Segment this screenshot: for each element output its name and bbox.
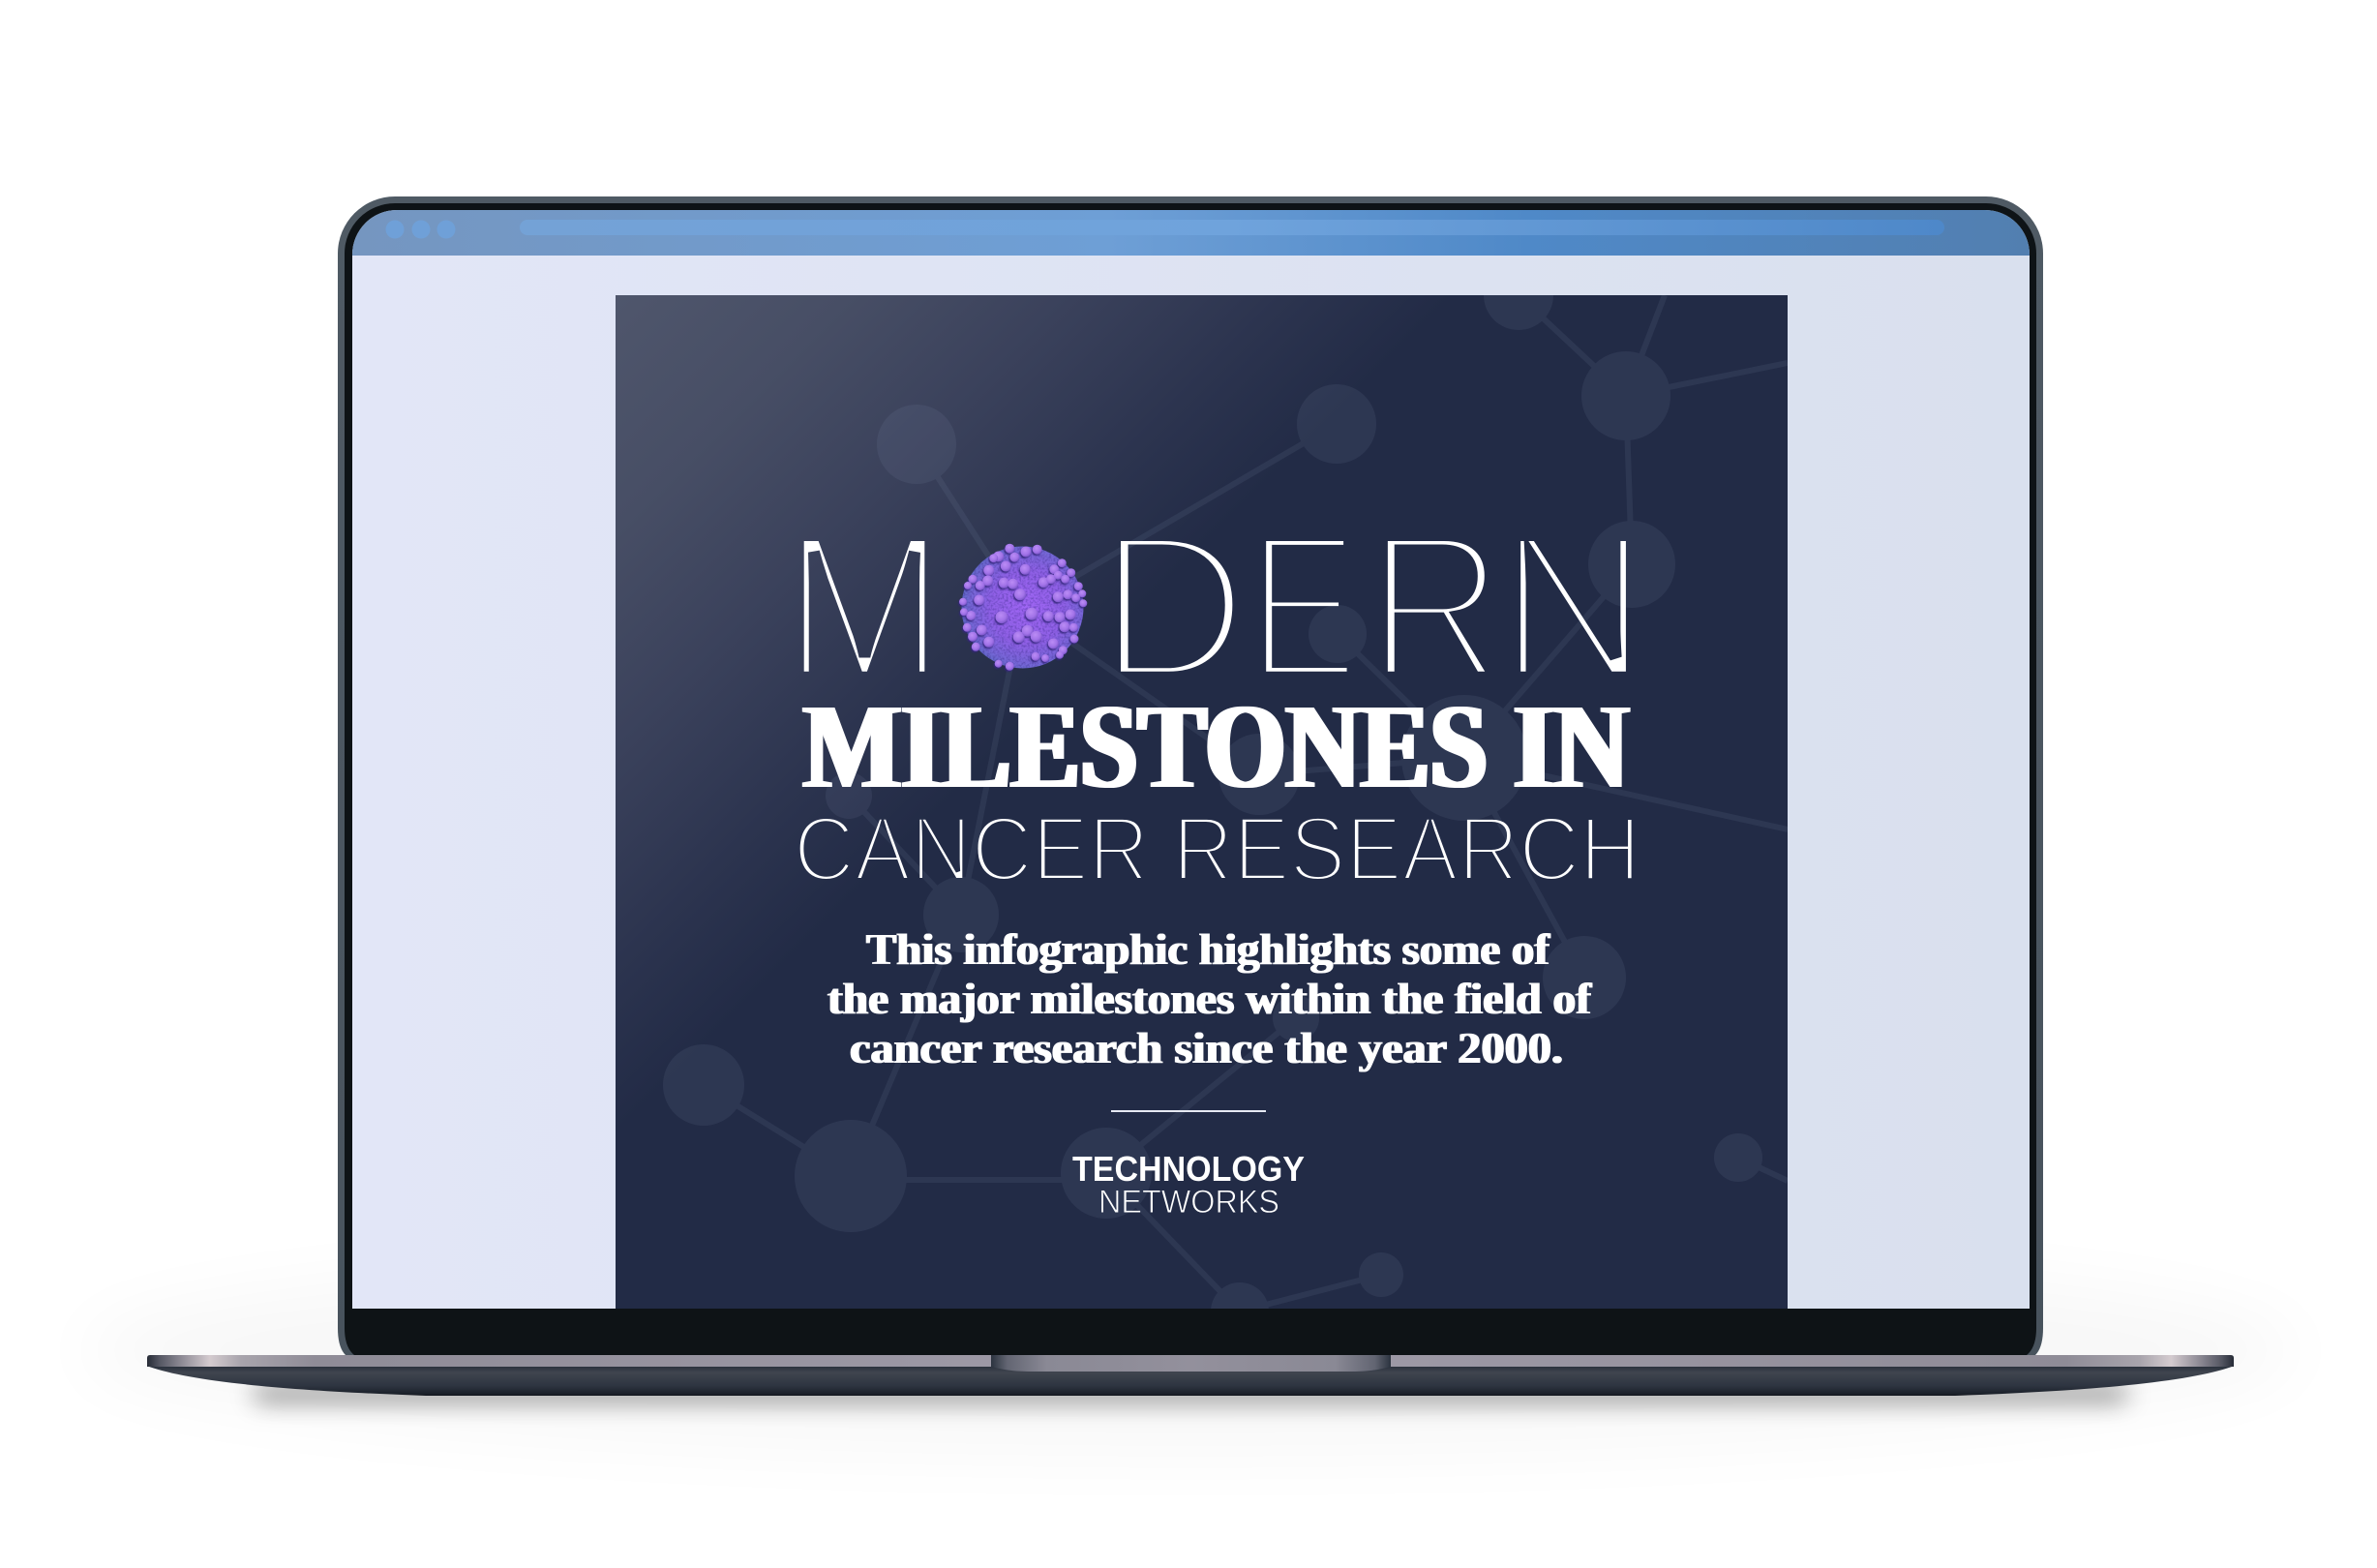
title: MILESTONES IN: MILESTONES IN	[803, 680, 1629, 814]
logo: Technology Networks: NETWORKS	[1098, 1184, 1279, 1221]
divider	[1111, 1110, 1266, 1112]
laptop screen background	[352, 210, 2030, 1309]
title: MODERN: D	[1098, 491, 1249, 722]
title: CANCER RESEARCH: CANCER RESEARCH	[794, 798, 1640, 900]
logo: Technology Networks: TECHNOLOGY	[1072, 1149, 1305, 1189]
soft shadow under laptop	[77, 1244, 2303, 1457]
logo: Technology Networks	[1072, 1156, 1305, 1213]
molecular network background	[663, 260, 1788, 1341]
title: MODERN: N	[1497, 491, 1649, 722]
title: MODERN: R	[1367, 491, 1504, 722]
intro paragraph	[827, 925, 1592, 1072]
hinge notch	[991, 1355, 1391, 1372]
laptop lid	[338, 196, 2043, 1355]
base silver edge	[147, 1355, 2234, 1367]
icon: window dots	[385, 221, 455, 238]
browser bar	[352, 210, 2030, 256]
laptop base	[147, 1355, 2234, 1396]
icon: purple cancer cell replacing the O	[959, 544, 1087, 671]
title: MODERN	[803, 541, 1626, 672]
title: MODERN: M	[782, 491, 947, 722]
intro paragraph: the major milestones within the field of	[827, 975, 1592, 1023]
title: MODERN: E	[1248, 491, 1359, 722]
panel: infographic cover	[616, 260, 1788, 1341]
intro paragraph: cancer research since the year 2000.	[850, 1024, 1563, 1072]
base underside	[149, 1367, 2232, 1396]
intro paragraph: This infographic highlights some of	[866, 925, 1550, 974]
address bar	[520, 220, 1944, 235]
